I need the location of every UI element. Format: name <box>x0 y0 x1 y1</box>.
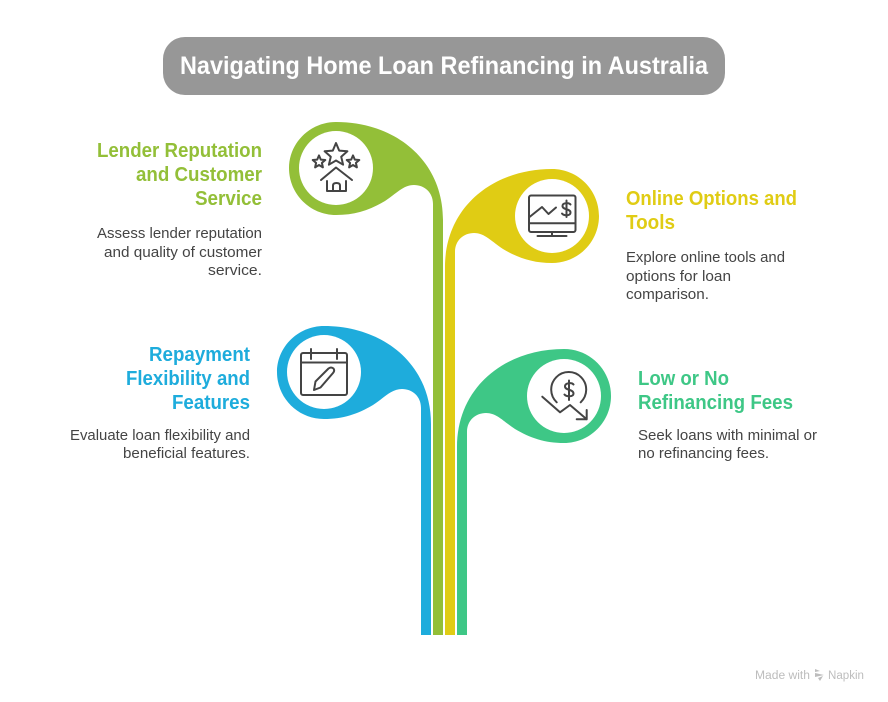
panel: lender reputation <box>97 122 443 635</box>
heading: low fees: Refinancing Fees <box>638 392 793 414</box>
panel: low fees <box>457 349 817 635</box>
heading: low fees <box>638 368 793 414</box>
heading: lender reputation: and Customer <box>136 164 262 186</box>
heading: repayment flexibility <box>126 344 250 414</box>
watermark <box>755 669 864 682</box>
title <box>163 37 725 95</box>
panel: repayment flexibility <box>70 326 431 635</box>
watermark: Napkin <box>828 670 864 682</box>
watermark: Made with <box>755 670 810 682</box>
text: low fees description: no refinancing fees. <box>638 446 769 462</box>
heading: online options <box>626 188 797 234</box>
text: online options description: comparison. <box>626 287 709 303</box>
text: lender reputation description: and quality of customer <box>104 245 262 261</box>
title: Navigating Home Loan Refinancing in Australia <box>180 52 709 80</box>
icon: dollar with falling arrow <box>527 359 601 433</box>
text: online options description: Explore online tools and <box>626 250 785 266</box>
heading: lender reputation: Service <box>195 188 262 210</box>
heading: low fees: Low or No <box>638 368 729 390</box>
icon: stars and house <box>299 131 373 205</box>
heading: lender reputation: Lender Reputation <box>97 140 262 162</box>
text: online options description <box>626 250 785 303</box>
icon: calendar with pencil <box>287 335 361 409</box>
text: repayment flexibility description: beneficial features. <box>123 446 250 462</box>
text: online options description: options for loan <box>626 269 731 285</box>
icon: monitor with chart <box>515 179 589 253</box>
text: low fees description: Seek loans with minimal or <box>638 428 817 444</box>
text: repayment flexibility description: Evaluate loan flexibility and <box>70 428 250 444</box>
heading: repayment flexibility: Flexibility and <box>126 368 250 390</box>
heading: repayment flexibility: Repayment <box>149 344 250 366</box>
text: repayment flexibility description <box>70 428 250 462</box>
stem: teal <box>457 349 611 635</box>
stem: green <box>289 122 443 635</box>
heading: lender reputation <box>97 140 262 210</box>
text: lender reputation description: Assess lender reputation <box>97 226 262 242</box>
stem: yellow <box>445 169 599 635</box>
text: low fees description <box>638 428 817 462</box>
heading: online options: Tools <box>626 212 675 234</box>
heading: online options: Online Options and <box>626 188 797 210</box>
text: lender reputation description: service. <box>208 263 262 279</box>
text: lender reputation description <box>97 226 262 279</box>
stem: blue <box>277 326 431 635</box>
heading: repayment flexibility: Features <box>172 392 250 414</box>
panel: online options <box>445 169 797 635</box>
